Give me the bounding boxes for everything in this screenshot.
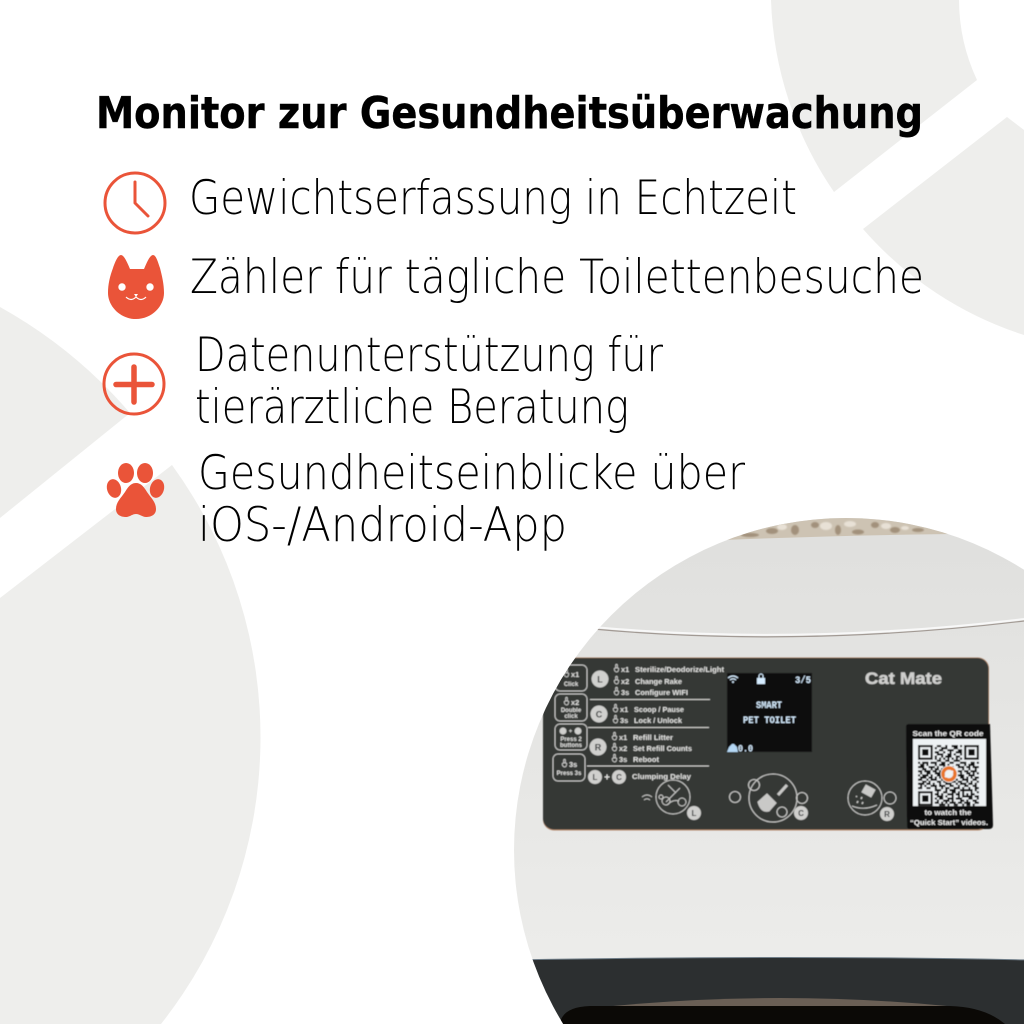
QR code [918, 745, 979, 806]
key legend text: x1 [571, 670, 579, 679]
function labels [632, 665, 725, 781]
key legend text: x2 [571, 698, 579, 707]
badge letters: R [595, 742, 602, 752]
function labels: Reboot [633, 755, 660, 764]
badge letters: C [616, 773, 622, 782]
key legend text: + [569, 729, 573, 735]
key legend text: 3s [569, 760, 577, 769]
text: visits: Zähler für tägliche Toilettenbesuche [190, 250, 924, 305]
OLED screen: PET TOILET [743, 716, 796, 727]
function labels: Sterilize/Deodorize/Light [635, 665, 725, 674]
QR sticker [906, 724, 993, 829]
dark base [510, 958, 1024, 1024]
background shape: top right upper arc [771, 0, 977, 192]
press counters [612, 664, 629, 764]
key legend text: Press 2 [560, 737, 582, 743]
press counters: 3s [621, 688, 629, 697]
text: app: iOS-/Android-App [198, 498, 567, 553]
key legend text: click [564, 714, 578, 720]
badge letters: C [798, 809, 804, 818]
badge letters [593, 674, 890, 819]
dial L [642, 780, 690, 814]
control panel [543, 658, 993, 830]
key legend text: Double [561, 708, 582, 714]
dial C [730, 774, 808, 822]
tray opening [613, 998, 947, 1006]
badge letters: L [593, 773, 598, 782]
feature: vet support [104, 328, 664, 435]
press counters: x2 [621, 677, 629, 686]
press counters: x1 [620, 705, 628, 714]
text: vet [195, 328, 664, 435]
function labels: Configure WIFI [635, 688, 688, 697]
QR sticker: to watch the [924, 808, 972, 817]
key legend text [557, 669, 583, 777]
icon: plus [104, 354, 164, 414]
function labels: Set Refill Counts [633, 744, 692, 753]
lid seam [593, 619, 1024, 637]
OLED screen: SMART [756, 701, 782, 712]
press counters: 3s [620, 716, 628, 725]
text: app: Gesundheitseinblicke über [198, 446, 746, 501]
QR sticker: Scan the QR code [912, 729, 984, 738]
feature: app [105, 446, 746, 553]
press counters: x2 [619, 744, 627, 753]
badge letters: L [692, 809, 697, 818]
icon: clock [105, 173, 165, 233]
function dividers [587, 700, 710, 766]
function labels: Clumping Delay [632, 772, 692, 781]
title: Monitor zur Gesundheitsüberwachung [96, 88, 923, 139]
text: vet: tierärztliche Beratung [195, 380, 629, 435]
product photo in circle [500, 510, 1024, 1024]
function labels: Lock / Unlock [634, 716, 683, 725]
QR sticker: “Quick Start” videos. [910, 818, 988, 827]
background shape: left upper arc [0, 307, 130, 518]
badge letters: C [596, 710, 603, 720]
OLED screen: 0.0 [738, 744, 753, 756]
key legend text: Click [564, 682, 579, 688]
badge letters: R [884, 810, 890, 819]
text: weight: Gewichtserfassung in Echtzeit [189, 171, 797, 226]
dial R [848, 781, 896, 815]
brand logo: Cat Mate [865, 669, 942, 688]
badge letters: + [604, 772, 610, 784]
key legend boxes [553, 665, 587, 781]
icon: paw [105, 463, 166, 517]
feature: toilet visits [108, 250, 924, 319]
button badges [588, 670, 894, 821]
background shape: top right lower arc [863, 117, 1024, 335]
press counters: x1 [621, 665, 629, 674]
press counters: x1 [619, 733, 627, 742]
text: vet: Datenunterstützung für [195, 328, 664, 383]
function labels: Scoop / Pause [634, 705, 684, 714]
QR logo [940, 766, 958, 782]
background shape: left lower circle [0, 465, 260, 1024]
function labels: Refill Litter [633, 733, 673, 742]
feature: real-time weight [105, 171, 797, 233]
icon: cat face [108, 255, 164, 319]
litter [728, 518, 948, 540]
key legend text: buttons [560, 743, 583, 749]
OLED screen: 3/5 [795, 675, 811, 687]
badge letters: L [597, 674, 603, 684]
key legend text: Press 3s [557, 771, 582, 777]
press counters: 3s [619, 755, 627, 764]
OLED screen [727, 673, 812, 756]
function labels: Change Rake [635, 677, 682, 686]
text: app [198, 446, 746, 553]
